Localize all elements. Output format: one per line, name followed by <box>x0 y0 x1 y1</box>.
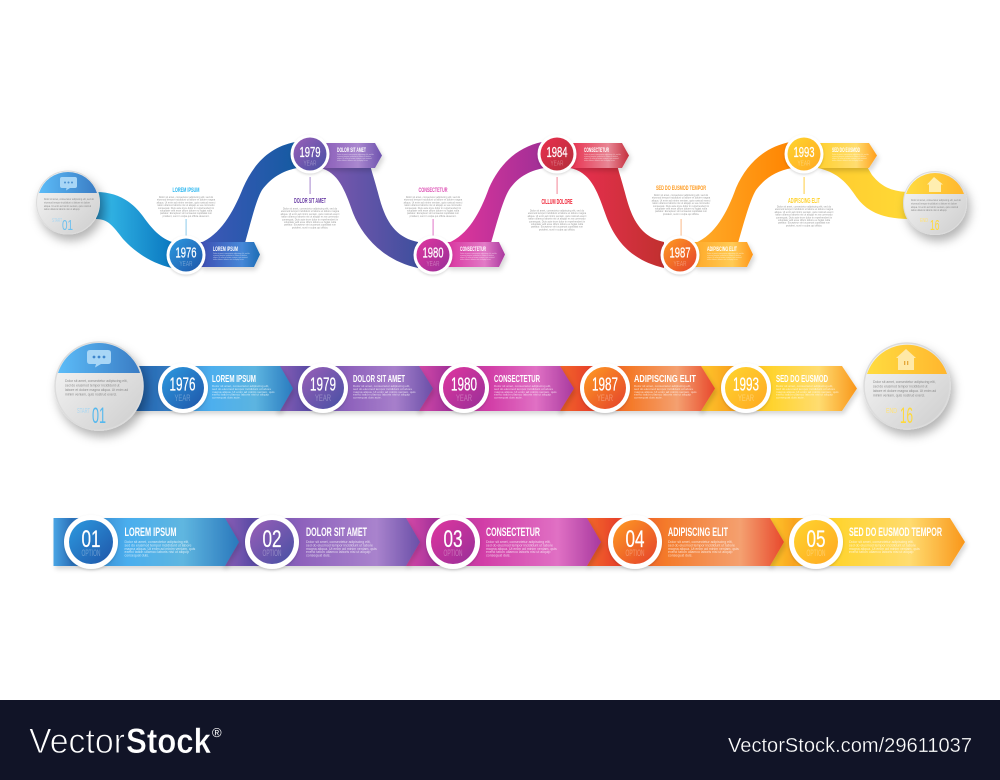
tab: 1984: Dolor sit amet, consectetur adipiscing elit, sed do <box>584 153 621 156</box>
text block: dolor sit amet 1979: consequat. Duis aute irure dolor in reprehenderit in <box>282 218 339 221</box>
tab: 1980: CONSECTETUR <box>460 247 486 253</box>
tab: 1984: aliqua. Ut enim ad minim veniam, quis nostrud <box>584 157 619 160</box>
start circle: year timeline: 01 <box>92 403 106 428</box>
text block: lorem ipsum 1976: consequat. Duis aute irure dolor in reprehenderit in <box>158 207 215 210</box>
tab: 1979: Dolor sit amet, consectetur adipiscing elit, sed do <box>337 153 374 156</box>
logo: VectorStock <box>29 722 222 761</box>
tab: 1976: tation ullamco laboris nisi ut aliquip ex ea <box>213 258 244 261</box>
segment text: consectetur: consequat duis aute. <box>494 396 523 400</box>
start circle: wave timeline: Dolor sit amet, consectetur adipiscing elit, sed do <box>44 198 95 201</box>
option badge: 01 <box>64 515 118 569</box>
text block: consectetur 1980: pariatur. Excepteur sint occaecat cupidatat non <box>407 212 460 215</box>
start circle: year timeline: minim veniam, quis nostrud exerci. <box>65 392 117 396</box>
start circle: wave timeline: 01 <box>62 217 73 234</box>
text block: cillum dolore 1984: proident, sunt in culpa qui officia. <box>539 228 575 231</box>
segment text: adipiscing elit: sed do eiusmod tempor incididunt ut labore <box>668 543 735 547</box>
year badge: 1993: 1993 <box>794 145 814 161</box>
year badge: 1984 <box>538 134 576 174</box>
segment text: sed do eusmod: exerci tation ullamco laboris nisi ut aliquip <box>776 393 833 397</box>
arrow segment: yellow <box>698 366 857 411</box>
ribbon: 1987 to 1993 <box>695 142 792 243</box>
segment text: consectetur: exerci tation ullamco laboris nisi ut aliquip <box>486 550 550 554</box>
tab: 1976: Dolor sit amet, consectetur adipiscing elit, sed do <box>213 252 250 255</box>
text block: consectetur 1980: consequat. Duis aute irure dolor in reprehenderit in <box>405 207 462 210</box>
arrow segment: orange <box>557 366 715 411</box>
segment text: dolor sit amet: consequat duis aute. <box>353 396 382 400</box>
segment text: lorem ipsum: LOREM IPSUM <box>124 525 176 539</box>
logo: VectorStock: ® <box>212 725 222 740</box>
arrow segment: purple <box>222 518 420 566</box>
text block: cillum dolore 1984: tation ullamco laboris nisi ut aliquip ex ea commodo <box>528 218 586 221</box>
tab: 1980: eiusmod tempor incididunt ut labore et dolore <box>460 254 494 257</box>
year badge: 1976: YEAR <box>174 393 191 404</box>
segment text: lorem ipsum: Dolor sit amet, consectetur adipiscing elit, <box>212 384 269 388</box>
start circle: year timeline: START <box>77 408 90 415</box>
end circle: year timeline: Dolor sit amet, consectetur adipiscing elit, <box>873 380 936 384</box>
end circle: year timeline <box>864 343 950 429</box>
segment text: dolor sit amet: magna aliqua. Ut enim ad minim veniam, quis <box>353 390 416 394</box>
end circle: year timeline: END <box>886 408 897 415</box>
option badge: 04: OPTION <box>626 548 645 559</box>
text block: dolor sit amet 1979: DOLOR SIT AMET <box>294 198 326 205</box>
start circle: wave timeline: aliqua. Ut enim ad minim veniam, quis nostrud <box>44 205 92 208</box>
year badge: 1979 <box>290 134 330 174</box>
segment text: consectetur: Dolor sit amet, consectetur adipiscing elit, <box>494 384 551 388</box>
tab: 1993: eiusmod tempor incididunt ut labore et dolore <box>832 155 866 158</box>
tab: 1993: SED DO EUSMOD <box>832 148 860 154</box>
segment text: lorem ipsum: sed do eiusmod tempor incididunt ut labore <box>212 387 271 391</box>
segment text: adipiscing elit: consequat duis. <box>668 554 693 558</box>
segment text: adipiscing elit: ADIPISCING ELIT <box>668 525 728 539</box>
year badge: 1980: YEAR <box>456 393 472 404</box>
text block: dolor sit amet 1979: Dolor sit amet, consectetur adipiscing elit, sed do <box>283 208 338 210</box>
tab: 1979: DOLOR SIT AMET <box>337 148 366 154</box>
start circle: year timeline: labore et dolore magna aliqua. Ut enim ad <box>65 388 128 392</box>
end circle: wave timeline: tation ullamco laboris nisi ut aliquip. <box>911 209 947 212</box>
year badge: 1987: 1987 <box>670 246 690 262</box>
end circle: year timeline: sed do eiusmod tempor incididunt ut <box>873 384 928 388</box>
tab: 1980: tation ullamco laboris nisi ut aliquip ex ea <box>460 258 491 261</box>
tab: 1984: eiusmod tempor incididunt ut labore et dolore <box>584 155 618 158</box>
text block: lorem ipsum 1976: tation ullamco laboris nisi ut aliquip ex ea commodo <box>157 204 215 207</box>
segment text: consectetur: magna aliqua. Ut enim ad minim veniam, quis <box>494 390 557 394</box>
year badge: 1993 <box>721 363 771 413</box>
option badge: 02: OPTION <box>262 548 282 559</box>
tab: 1987: Dolor sit amet, consectetur adipiscing elit, sed do <box>707 252 744 255</box>
text block: dolor sit amet 1979 <box>281 177 340 229</box>
segment text: adipiscing elit: magna aliqua. Ut enim ad minim veniam, quis <box>668 547 739 551</box>
segment text: adipiscing elit: exerci tation ullamco laboris nisi ut aliquip <box>634 393 691 397</box>
text block: consectetur 1980: eiusmod tempor incididunt ut labore et dolore magna <box>404 199 463 202</box>
year badge: 1980: 1980 <box>451 374 477 394</box>
text block: cillum dolore 1984: consequat. Duis aute irure dolor in reprehenderit in <box>529 220 586 223</box>
text block: sed do eusmod tempor 1987: Dolor sit amet, consectetur adipiscing elit, sed do <box>654 194 709 197</box>
text block: adipiscing elit 1993: eiusmod tempor incididunt ut labore et dolore magna <box>775 208 834 211</box>
option badge: 04: 04 <box>626 526 644 553</box>
tab: 1984: tation ullamco laboris nisi ut aliquip ex ea <box>584 159 615 162</box>
year badge: 1987 <box>660 236 700 274</box>
logo: VectorStock: Stock <box>126 722 211 761</box>
year badge: 1979 <box>298 363 348 413</box>
segment text: sed do eusmod <box>776 374 839 400</box>
segment text: dolor sit amet <box>306 525 377 558</box>
text block: sed do eusmod tempor 1987: pariatur. Excepteur sint occaecat cupidatat non <box>655 210 708 213</box>
year badge: 1987 <box>580 363 630 413</box>
segment text: lorem ipsum: exerci tation ullamco laboris nisi ut aliquip <box>124 550 189 554</box>
text block: adipiscing elit 1993: proident, sunt in culpa qui officia. <box>786 224 822 227</box>
tab: 1979: aliqua. Ut enim ad minim veniam, quis nostrud <box>337 157 372 160</box>
text block: dolor sit amet 1979: voluptate velit esse cillum dolore eu fugiat nulla <box>284 221 337 224</box>
year badge: 1993: 1993 <box>733 374 759 394</box>
text block: lorem ipsum 1976: LOREM IPSUM <box>172 187 200 194</box>
start circle: year timeline: sed do eiusmod tempor incididunt ut <box>65 384 120 388</box>
segment text: consectetur <box>494 374 557 400</box>
text block: consectetur 1980: Dolor sit amet, consectetur adipiscing elit, sed do <box>406 196 461 199</box>
segment text: consectetur <box>486 525 557 558</box>
segment text: consectetur: Dolor sit amet, consectetur adipiscing elit, <box>486 540 551 544</box>
segment text: sed do eusmod tempor <box>849 525 942 554</box>
text block: sed do eusmod tempor 1987: eiusmod tempor incididunt ut labore et dolore magna <box>652 197 711 200</box>
year badge: 1979: YEAR <box>315 393 331 404</box>
year badge: 1987: YEAR <box>674 259 687 268</box>
start circle: year timeline: Dolor sit amet, consectetur adipiscing elit, <box>65 379 128 383</box>
segment text: lorem ipsum: sed do eiusmod tempor incididunt ut labore <box>124 543 191 547</box>
text block: lorem ipsum 1976 <box>157 187 216 236</box>
segment text: adipiscing elit: consequat duis aute. <box>634 396 663 400</box>
segment text: consectetur: magna aliqua. Ut enim ad minim veniam, quis <box>486 547 557 551</box>
segment text: dolor sit amet: sed do eiusmod tempor incididunt ut labore <box>353 387 412 391</box>
segment text: adipiscing elit: sed do eiusmod tempor incididunt ut labore <box>634 387 693 391</box>
segment text: lorem ipsum: exerci tation ullamco laboris nisi ut aliquip <box>212 393 269 397</box>
segment text: adipiscing elit <box>668 525 739 558</box>
text block: sed do eusmod tempor 1987: aliqua. Ut enim ad minim veniam, quis nostrud exerci <box>652 199 711 202</box>
segment text: lorem ipsum <box>124 525 196 558</box>
option badge: 05: 05 <box>806 526 826 553</box>
year badge: 1976: YEAR <box>180 259 193 268</box>
end circle: wave timeline <box>904 172 966 234</box>
text block: dolor sit amet 1979: eiusmod tempor incididunt ut labore et dolore magna <box>281 210 340 213</box>
logo: VectorStock: Vector <box>29 722 125 761</box>
segment text: adipiscing elit: ADIPISCING ELIT <box>634 374 696 385</box>
tab: 1987: eiusmod tempor incididunt ut labore et dolore <box>707 254 741 257</box>
tab: 1993 <box>818 143 877 168</box>
arrow segment: blue <box>130 366 293 411</box>
segment text: lorem ipsum: LOREM IPSUM <box>212 374 256 385</box>
tab: 1984 <box>570 143 629 168</box>
segment text: sed do eusmod: magna aliqua. Ut enim ad minim veniam, quis <box>776 390 839 394</box>
ribbon: 1980 to 1984 <box>448 142 544 243</box>
tab: 1976: eiusmod tempor incididunt ut labore et dolore <box>213 254 247 257</box>
text block: sed do eusmod tempor 1987: proident, sunt in culpa qui officia. <box>663 213 699 216</box>
text block: adipiscing elit 1993: voluptate velit esse cillum dolore eu fugiat nulla <box>778 219 831 222</box>
text block: consectetur 1980: tation ullamco laboris nisi ut aliquip ex ea commodo <box>404 204 462 207</box>
tab: 1993: Dolor sit amet, consectetur adipiscing elit, sed do <box>832 153 869 156</box>
text block: consectetur 1980: CONSECTETUR <box>418 187 448 194</box>
text block: adipiscing elit 1993: consequat. Duis aute irure dolor in reprehenderit in <box>776 216 833 219</box>
arrow segment: blue <box>54 518 239 566</box>
segment text: adipiscing elit: Dolor sit amet, consectetur adipiscing elit, <box>634 384 691 388</box>
option badge: 01: 01 <box>82 526 100 553</box>
start circle: year timeline <box>55 342 143 430</box>
tab: 1987 <box>694 242 753 267</box>
tab: 1976 <box>200 242 260 267</box>
segment text: sed do eusmod tempor: Dolor sit amet, consectetur adipiscing elit, <box>849 540 914 544</box>
start circle: wave timeline: tation ullamco laboris nisi ut aliquip. <box>44 208 80 211</box>
text block: lorem ipsum 1976: Dolor sit amet, consectetur adipiscing elit, sed do <box>159 196 214 199</box>
wave timeline <box>36 134 966 274</box>
text block: consectetur 1980: aliqua. Ut enim ad minim veniam, quis nostrud exerci <box>404 201 463 204</box>
text block: sed do eusmod tempor 1987: SED DO EUSMOD TEMPOR <box>656 185 706 192</box>
segment text: consectetur: sed do eiusmod tempor incididunt ut labore <box>494 387 553 391</box>
segment text: dolor sit amet: consequat duis. <box>306 554 331 558</box>
tab: 1976: LOREM IPSUM <box>213 247 238 253</box>
year badge: 1979: 1979 <box>300 145 320 161</box>
start circle: wave timeline <box>36 171 100 234</box>
option badge: 05 <box>789 515 843 569</box>
text block: cillum dolore 1984: voluptate velit esse cillum dolore eu fugiat nulla <box>531 223 584 226</box>
text block: dolor sit amet 1979: pariatur. Excepteur sint occaecat cupidatat non <box>284 224 337 227</box>
text block: cillum dolore 1984: Dolor sit amet, consectetur adipiscing elit, sed do <box>530 210 585 212</box>
text block: lorem ipsum 1976: proident, sunt in culpa qui officia deserunt. <box>163 215 210 218</box>
text block: adipiscing elit 1993: pariatur. Excepteur sint occaecat cupidatat non <box>778 222 831 225</box>
tab: 1979: eiusmod tempor incididunt ut labore et dolore <box>337 155 371 158</box>
option badge: 03: OPTION <box>444 548 463 559</box>
year badge: 1976: 1976 <box>176 246 196 262</box>
tab: 1987: ADIPISCING ELIT <box>707 247 737 253</box>
text block: adipiscing elit 1993: ADIPISCING ELIT <box>788 198 820 205</box>
text block: dolor sit amet 1979: proident, sunt in culpa qui officia. <box>292 226 328 229</box>
segment text: dolor sit amet: DOLOR SIT AMET <box>353 374 405 385</box>
year badge: 1987: YEAR <box>597 393 613 404</box>
segment text: dolor sit amet: Dolor sit amet, consectetur adipiscing elit, <box>306 540 371 544</box>
image id: VectorStock.com/29611037 <box>728 735 972 757</box>
text block: dolor sit amet 1979: aliqua. Ut enim ad minim veniam, quis nostrud exerci <box>281 213 340 216</box>
year badge: 1976 <box>166 236 206 274</box>
segment text: adipiscing elit: Dolor sit amet, consectetur adipiscing elit, <box>668 540 733 544</box>
segment text: dolor sit amet: sed do eiusmod tempor incididunt ut labore <box>306 543 373 547</box>
year badge: 1980: 1980 <box>422 246 444 262</box>
tab: 1976: aliqua. Ut enim ad minim veniam, quis nostrud <box>213 256 248 259</box>
text block: sed do eusmod tempor 1987: voluptate velit esse cillum dolore eu fugiat nulla <box>655 208 708 210</box>
segment text: consectetur: consequat duis. <box>486 554 511 558</box>
option badge: 02: 02 <box>262 526 282 553</box>
text block: adipiscing elit 1993 <box>775 177 834 227</box>
text block: cillum dolore 1984: eiusmod tempor incididunt ut labore et dolore magna <box>528 212 587 215</box>
segment text: lorem ipsum: Dolor sit amet, consectetur adipiscing elit, <box>124 540 189 544</box>
text block: lorem ipsum 1976: voluptate velit esse cillum dolore eu fugiat nulla <box>160 210 213 212</box>
icon: house <box>896 349 916 370</box>
text block: cillum dolore 1984 <box>528 177 587 231</box>
segment text: lorem ipsum: consequat duis aute. <box>212 396 241 400</box>
year badge: 1979: 1979 <box>310 374 336 394</box>
option badge: 05: OPTION <box>806 548 826 559</box>
segment text: lorem ipsum: consequat duis. <box>124 554 149 558</box>
year badge: 1980 <box>414 236 452 274</box>
text block: sed do eusmod tempor 1987 <box>652 185 711 236</box>
text block: lorem ipsum 1976: aliqua. Ut enim ad minim veniam, quis nostrud exerci <box>157 201 216 204</box>
text block: adipiscing elit 1993: Dolor sit amet, consectetur adipiscing elit, sed do <box>777 206 832 208</box>
option badge: 03: 03 <box>444 526 462 553</box>
arrow segment: purple <box>275 366 433 411</box>
tab: 1987: tation ullamco laboris nisi ut aliquip ex ea <box>707 258 738 261</box>
ribbon: 1976 to 1979 <box>200 142 297 243</box>
year badge: 1976: 1976 <box>170 374 196 394</box>
year badge: 1993 <box>784 134 824 174</box>
segment text: sed do eusmod tempor: exerci tation ullamco laboris nisi ut aliquip <box>849 550 913 554</box>
segment text: dolor sit amet: DOLOR SIT AMET <box>306 525 367 539</box>
year badge: 1980 <box>439 363 489 413</box>
ribbon: start to 1976 <box>96 192 172 268</box>
arrow segment: yellow <box>768 518 965 566</box>
segment text: sed do eusmod: sed do eiusmod tempor incididunt ut labore <box>776 387 835 391</box>
ribbon: 1979 to 1980 <box>320 160 418 268</box>
text block: adipiscing elit 1993: aliqua. Ut enim ad minim veniam, quis nostrud exerci <box>775 211 834 214</box>
text block: consectetur 1980 <box>404 187 463 236</box>
segment text: dolor sit amet: magna aliqua. Ut enim ad minim veniam, quis <box>306 547 377 551</box>
year badge: 1993: YEAR <box>738 393 754 404</box>
option badge: 04 <box>608 515 662 569</box>
segment text: consectetur: sed do eiusmod tempor incididunt ut labore <box>486 543 553 547</box>
segment text: adipiscing elit: magna aliqua. Ut enim ad minim veniam, quis <box>634 390 697 394</box>
tab: 1980: aliqua. Ut enim ad minim veniam, quis nostrud <box>460 256 495 259</box>
year badge: 1979: YEAR <box>304 158 317 168</box>
text block: dolor sit amet 1979: tation ullamco laboris nisi ut aliquip ex ea commodo <box>281 216 339 219</box>
text block: cillum dolore 1984: aliqua. Ut enim ad minim veniam, quis nostrud exerci <box>528 215 587 218</box>
segment text: dolor sit amet: exerci tation ullamco laboris nisi ut aliquip <box>306 550 370 554</box>
segment text: lorem ipsum: magna aliqua. Ut enim ad minim veniam, quis <box>212 390 275 394</box>
end circle: wave timeline: 16 <box>930 217 940 234</box>
end circle: year timeline: 16 <box>900 403 913 428</box>
end circle: wave timeline: eiusmod tempor incididunt ut labore et dolore <box>911 202 958 205</box>
year badge: 1987: 1987 <box>592 374 618 394</box>
segment text: sed do eusmod tempor: magna aliqua. Ut enim ad minim veniam, quis <box>849 547 920 551</box>
segment text: sed do eusmod tempor: sed do eiusmod tempor incididunt ut labore <box>849 543 916 547</box>
tab: 1993: tation ullamco laboris nisi ut aliquip ex ea <box>832 159 863 162</box>
text block: consectetur 1980: proident, sunt in culpa qui officia deserunt. <box>410 215 457 218</box>
text block: cillum dolore 1984: CILLUM DOLORE <box>542 199 573 206</box>
end circle: year timeline: minim veniam, quis nostrud exerci. <box>873 394 925 398</box>
segment text: dolor sit amet <box>353 374 416 400</box>
segment text: sed do eusmod: SED DO EUSMOD <box>776 374 828 385</box>
tab: 1993: aliqua. Ut enim ad minim veniam, quis nostrud <box>832 157 867 160</box>
ribbon: 1993 to end <box>818 160 910 219</box>
end circle: wave timeline: END <box>920 218 928 224</box>
tab: 1979: tation ullamco laboris nisi ut aliquip ex ea <box>337 159 368 162</box>
text block: lorem ipsum 1976: pariatur. Excepteur sint occaecat cupidatat non <box>160 212 213 215</box>
tab: 1979 <box>322 143 382 168</box>
end circle: wave timeline: aliqua. Ut enim ad minim veniam, quis nostrud <box>911 206 959 209</box>
start circle: wave timeline: START <box>52 218 62 224</box>
text block: adipiscing elit 1993: tation ullamco laboris nisi ut aliquip ex ea commodo <box>775 214 833 217</box>
year badge: 1993: YEAR <box>798 158 811 168</box>
icon: house <box>927 177 943 192</box>
tab: 1984: CONSECTETUR <box>584 148 609 154</box>
segment text: consectetur: CONSECTETUR <box>486 525 540 539</box>
option badge: 01: OPTION <box>82 548 101 559</box>
segment text: adipiscing elit <box>634 374 697 400</box>
segment text: lorem ipsum: magna aliqua. Ut enim ad minim veniam, quis <box>124 547 196 551</box>
icon: chat bubble <box>60 177 77 190</box>
start circle: wave timeline: eiusmod tempor incididunt ut labore et dolore <box>44 201 91 204</box>
arrow segment: magenta <box>405 518 601 566</box>
segment text: consectetur: exerci tation ullamco laboris nisi ut aliquip <box>494 393 551 397</box>
segment text: dolor sit amet: exerci tation ullamco laboris nisi ut aliquip <box>353 393 410 397</box>
option timeline <box>54 515 965 569</box>
straight year timeline <box>55 342 950 430</box>
end circle: year timeline: labore et dolore magna aliqua. Ut enim ad <box>873 389 936 393</box>
text block: sed do eusmod tempor 1987: tation ullamco laboris nisi ut aliquip ex ea commodo <box>652 202 710 205</box>
tab: 1980: Dolor sit amet, consectetur adipiscing elit, sed do <box>460 252 497 255</box>
year badge: 1984: YEAR <box>550 158 564 168</box>
footer bar <box>0 700 1000 780</box>
end circle: wave timeline: Dolor sit amet, consectetur adipiscing elit, sed do <box>911 199 962 202</box>
segment text: sed do eusmod: consequat duis aute. <box>776 396 805 400</box>
arrow segment: magenta <box>416 366 574 411</box>
ribbon: 1984 to 1987 <box>570 160 664 268</box>
year badge: 1976 <box>158 363 208 413</box>
year badge: 1984: 1984 <box>546 145 568 161</box>
text block: cillum dolore 1984: pariatur. Excepteur sint occaecat cupidatat non <box>531 226 584 229</box>
text block: consectetur 1980: voluptate velit esse cillum dolore eu fugiat nulla <box>407 210 460 212</box>
segment text: sed do eusmod: Dolor sit amet, consectetur adipiscing elit, <box>776 384 833 388</box>
text block: sed do eusmod tempor 1987: consequat. Duis aute irure dolor in reprehenderit in <box>653 205 710 208</box>
year badge: 1980: YEAR <box>426 259 440 268</box>
segment text: consectetur: CONSECTETUR <box>494 374 540 385</box>
tab: 1980 <box>447 242 505 267</box>
text block: lorem ipsum 1976: eiusmod tempor incididunt ut labore et dolore magna <box>157 199 216 202</box>
segment text: lorem ipsum <box>212 374 275 400</box>
option badge: 03 <box>426 515 480 569</box>
segment text: dolor sit amet: Dolor sit amet, consectetur adipiscing elit, <box>353 384 410 388</box>
icon: chat bubble <box>87 350 111 368</box>
option badge: 02 <box>245 515 299 569</box>
tab: 1987: aliqua. Ut enim ad minim veniam, quis nostrud <box>707 256 742 259</box>
segment text: adipiscing elit: exerci tation ullamco laboris nisi ut aliquip <box>668 550 732 554</box>
arrow segment: orange <box>586 518 784 566</box>
